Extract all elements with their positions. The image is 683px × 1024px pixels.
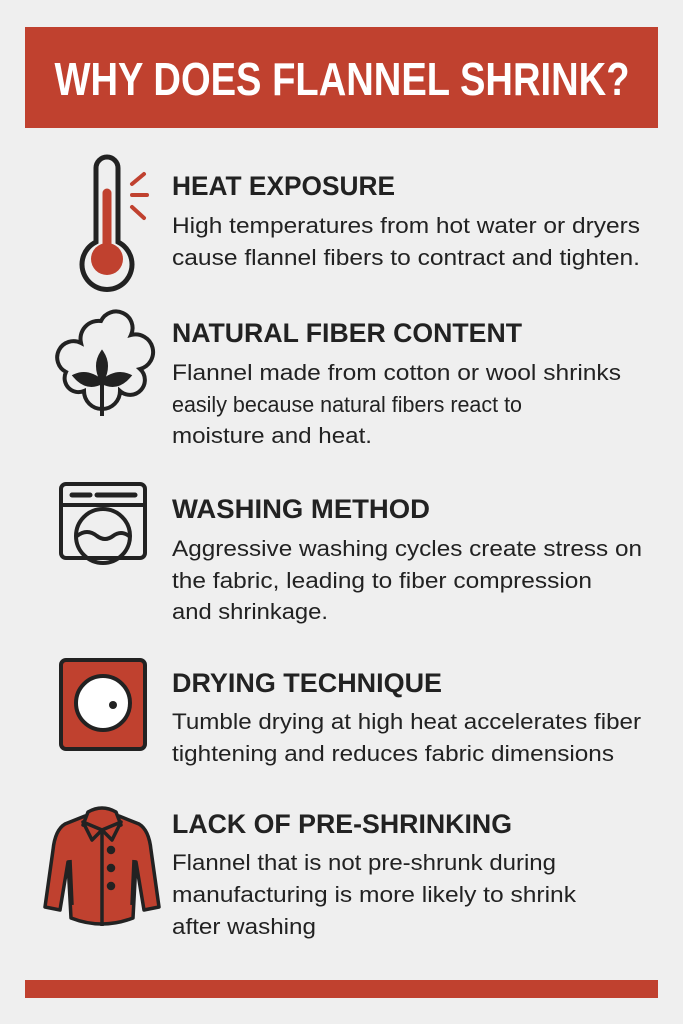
heading: natural fiber: NATURAL FIBER CONTENT (172, 318, 522, 348)
text: lack of pre-shrinking (172, 850, 577, 939)
text: natural fiber: moisture and heat. (172, 423, 372, 448)
text: heat exposure: cause flannel fibers to contract and tighten. (172, 245, 640, 270)
icon: cotton (57, 311, 153, 416)
icon: shirt (45, 808, 159, 926)
text: lack of pre-shrinking: manufacturing is more likely to shrink (172, 882, 577, 907)
title banner (25, 27, 658, 128)
text: natural fiber: Flannel made from cotton or wool shrinks (172, 360, 621, 385)
icon: dryer (61, 660, 145, 749)
text: natural fiber (172, 360, 621, 448)
icon: washing machine (61, 484, 145, 563)
text: washing method: Aggressive washing cycles create stress on (172, 536, 642, 561)
text: washing method: the fabric, leading to fiber compression (172, 568, 592, 593)
text: heat exposure (172, 213, 640, 270)
text: lack of pre-shrinking: Flannel that is not pre-shrunk during (172, 850, 556, 875)
heading: lack of pre-shrinking: LACK OF PRE-SHRINKING (172, 809, 512, 839)
icon: thermometer (82, 157, 147, 289)
text: natural fiber: easily because natural fibers react to (172, 392, 522, 417)
bottom bar (25, 980, 658, 998)
text: drying technique: tightening and reduces fabric dimensions (172, 741, 614, 766)
text: lack of pre-shrinking: after washing (172, 914, 316, 939)
text: drying technique: Tumble drying at high heat accelerates fiber (172, 709, 641, 734)
text: washing method: and shrinkage. (172, 599, 328, 624)
text: heat exposure: High temperatures from hot water or dryers (172, 213, 640, 238)
heading: heat exposure: HEAT EXPOSURE (172, 171, 395, 201)
heading: washing method: WASHING METHOD (172, 494, 430, 524)
text: washing method (172, 536, 642, 624)
text: drying technique (172, 709, 641, 766)
heading: drying technique: DRYING TECHNIQUE (172, 668, 442, 698)
